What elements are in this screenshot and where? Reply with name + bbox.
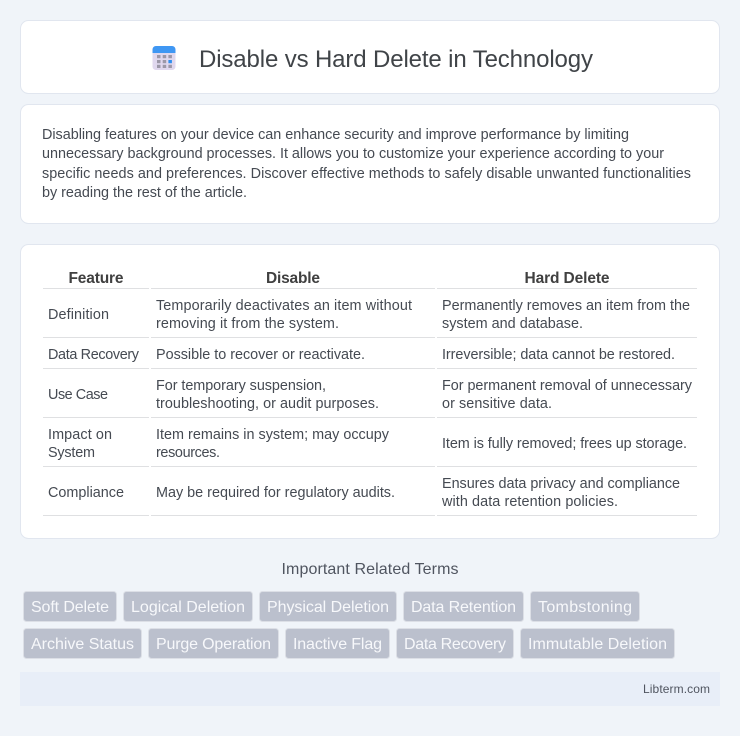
row: data recovery xyxy=(48,347,675,363)
row: definition: removing it from the system. xyxy=(156,316,339,332)
row: impact on system: Item remains in system; may occupy xyxy=(156,427,390,443)
tag: inactive flag xyxy=(286,628,390,658)
tag: data recovery: Data Recovery xyxy=(404,636,506,653)
tag: physical deletion xyxy=(260,592,396,622)
tag: purge operation: Purge Operation xyxy=(156,636,271,653)
row: definition: Temporarily deactivates an item without xyxy=(156,298,412,314)
intro paragraph: Disabling features on your device can enhance security and improve performance by limiting xyxy=(42,127,629,143)
tag: physical deletion: Physical Deletion xyxy=(267,599,389,616)
tag: data retention: Data Retention xyxy=(411,599,516,616)
table header: Hard Delete xyxy=(524,270,610,287)
row: definition xyxy=(48,298,690,332)
row: data recovery: Data Recovery xyxy=(48,347,140,363)
tag: tombstoning xyxy=(530,592,640,622)
row: compliance xyxy=(48,476,680,510)
panel: intro text xyxy=(20,104,720,224)
tag: data recovery xyxy=(396,628,514,658)
row: use case: For permanent removal of unnecessary xyxy=(442,378,693,394)
intro paragraph xyxy=(42,127,691,201)
tag: tombstoning: Tombstoning xyxy=(538,599,632,616)
tags row 2 xyxy=(24,628,674,658)
intro paragraph: unnecessary background processes. It allows you to customize your experience according to your xyxy=(42,146,664,162)
row: compliance: Ensures data privacy and compliance xyxy=(442,476,680,492)
intro paragraph: by reading the rest of the article. xyxy=(42,185,247,201)
icon: calendar xyxy=(152,46,176,70)
row: use case xyxy=(48,378,693,412)
footer credit: Libterm.com xyxy=(643,682,710,696)
title: Disable vs Hard Delete in Technology xyxy=(199,46,593,73)
row: use case: Use Case xyxy=(48,387,108,403)
tag: soft delete xyxy=(24,592,116,622)
row: impact on system xyxy=(48,427,687,461)
row: definition: system and database. xyxy=(442,316,583,332)
row: impact on system: Impact on xyxy=(48,427,112,443)
tag: data retention xyxy=(404,592,524,622)
tag: archive status xyxy=(24,628,142,658)
row: impact on system: resources. xyxy=(156,445,220,461)
row: impact on system: Item is fully removed; frees up storage. xyxy=(442,436,687,452)
panel: header xyxy=(20,20,720,94)
panel: comparison table xyxy=(20,244,720,538)
heading: related terms: Important Related Terms xyxy=(282,561,458,578)
row: data recovery: Possible to recover or reactivate. xyxy=(156,347,365,363)
row: compliance: May be required for regulatory audits. xyxy=(156,485,395,501)
row: use case: For temporary suspension, xyxy=(156,378,326,394)
row: data recovery: Irreversible; data cannot be restored. xyxy=(442,347,675,363)
table header: Feature xyxy=(68,270,124,287)
tag: immutable deletion: Immutable Deletion xyxy=(528,636,667,653)
row: definition: Definition xyxy=(48,307,109,323)
table header: Disable xyxy=(266,270,320,287)
tag: logical deletion: Logical Deletion xyxy=(131,599,245,616)
row: use case: or sensitive data. xyxy=(442,396,552,412)
table header xyxy=(68,270,610,287)
tag: logical deletion xyxy=(124,592,252,622)
row: use case: troubleshooting, or audit purposes. xyxy=(156,396,379,412)
tags row 1 xyxy=(24,592,640,622)
row: compliance: Compliance xyxy=(48,485,124,501)
tag: soft delete: Soft Delete xyxy=(31,599,109,616)
row: compliance: with data retention policies. xyxy=(441,494,618,510)
intro paragraph: specific needs and preferences. Discover effective methods to safely disable unwanted functionalities xyxy=(42,166,691,182)
tag: immutable deletion xyxy=(520,628,674,658)
tag: archive status: Archive Status xyxy=(31,636,134,653)
row: impact on system: System xyxy=(48,445,95,461)
tag: purge operation xyxy=(148,628,278,658)
footer xyxy=(20,672,720,706)
tag: inactive flag: Inactive Flag xyxy=(293,636,382,653)
row: definition: Permanently removes an item from the xyxy=(442,298,690,314)
